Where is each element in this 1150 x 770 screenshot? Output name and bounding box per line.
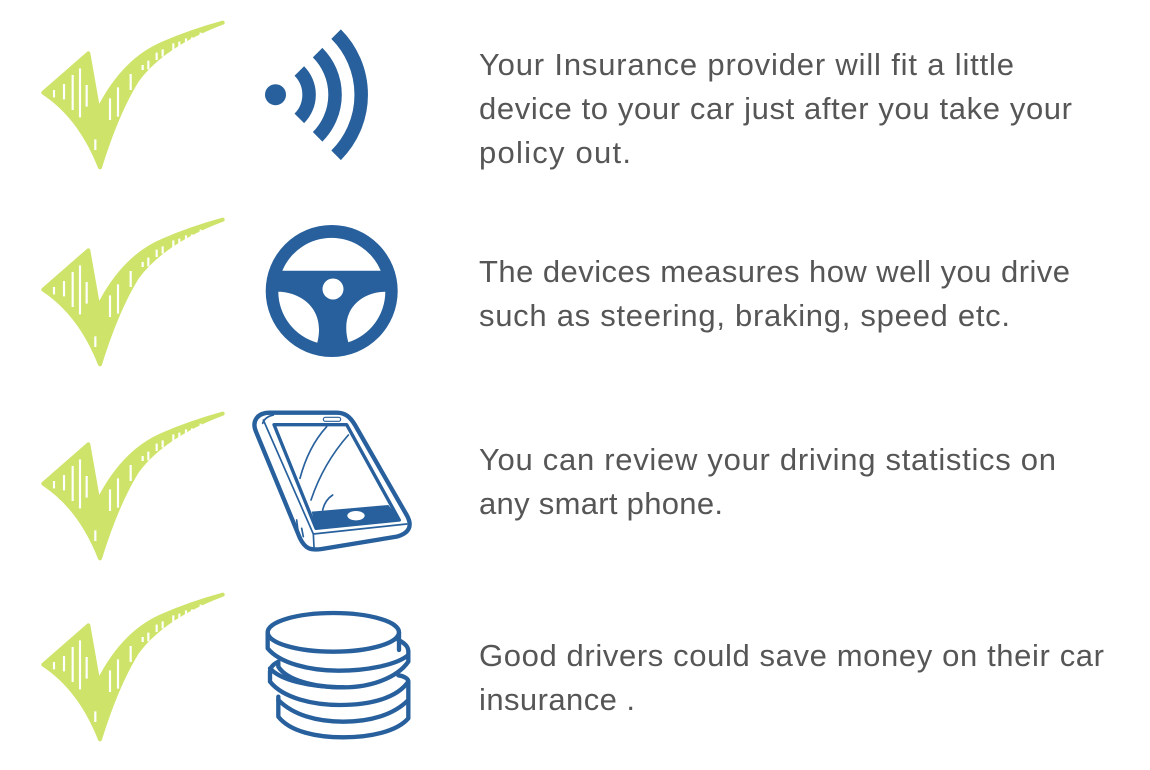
row 1: check mark xyxy=(43,23,223,167)
text: what the device measures xyxy=(479,254,1070,333)
text: reviewing statistics: You can review your driving statistics on xyxy=(479,442,1056,477)
text: fitting the device: device to your car just after you take your xyxy=(479,91,1072,126)
text: what the device measures: The devices measures how well you drive xyxy=(479,254,1070,289)
text: saving money xyxy=(479,638,1104,717)
icon: smart phone xyxy=(254,413,410,549)
row 4: check mark xyxy=(43,595,223,739)
icon: wireless signal xyxy=(265,34,361,155)
text: fitting the device: policy out. xyxy=(479,135,631,170)
text: saving money: Good drivers could save money on their car xyxy=(479,638,1104,673)
icon: steering wheel xyxy=(266,225,398,357)
text: reviewing statistics xyxy=(479,442,1056,521)
row 2: check mark xyxy=(43,220,223,364)
row 3: check mark xyxy=(43,414,223,558)
text: saving money: insurance . xyxy=(479,682,635,717)
text: fitting the device: Your Insurance provider will fit a little xyxy=(479,47,1014,82)
icon: stack of coins xyxy=(268,613,408,737)
text: reviewing statistics: any smart phone. xyxy=(479,486,723,521)
text: what the device measures: such as steering, braking, speed etc. xyxy=(479,298,1010,333)
text: fitting the device xyxy=(479,47,1072,170)
